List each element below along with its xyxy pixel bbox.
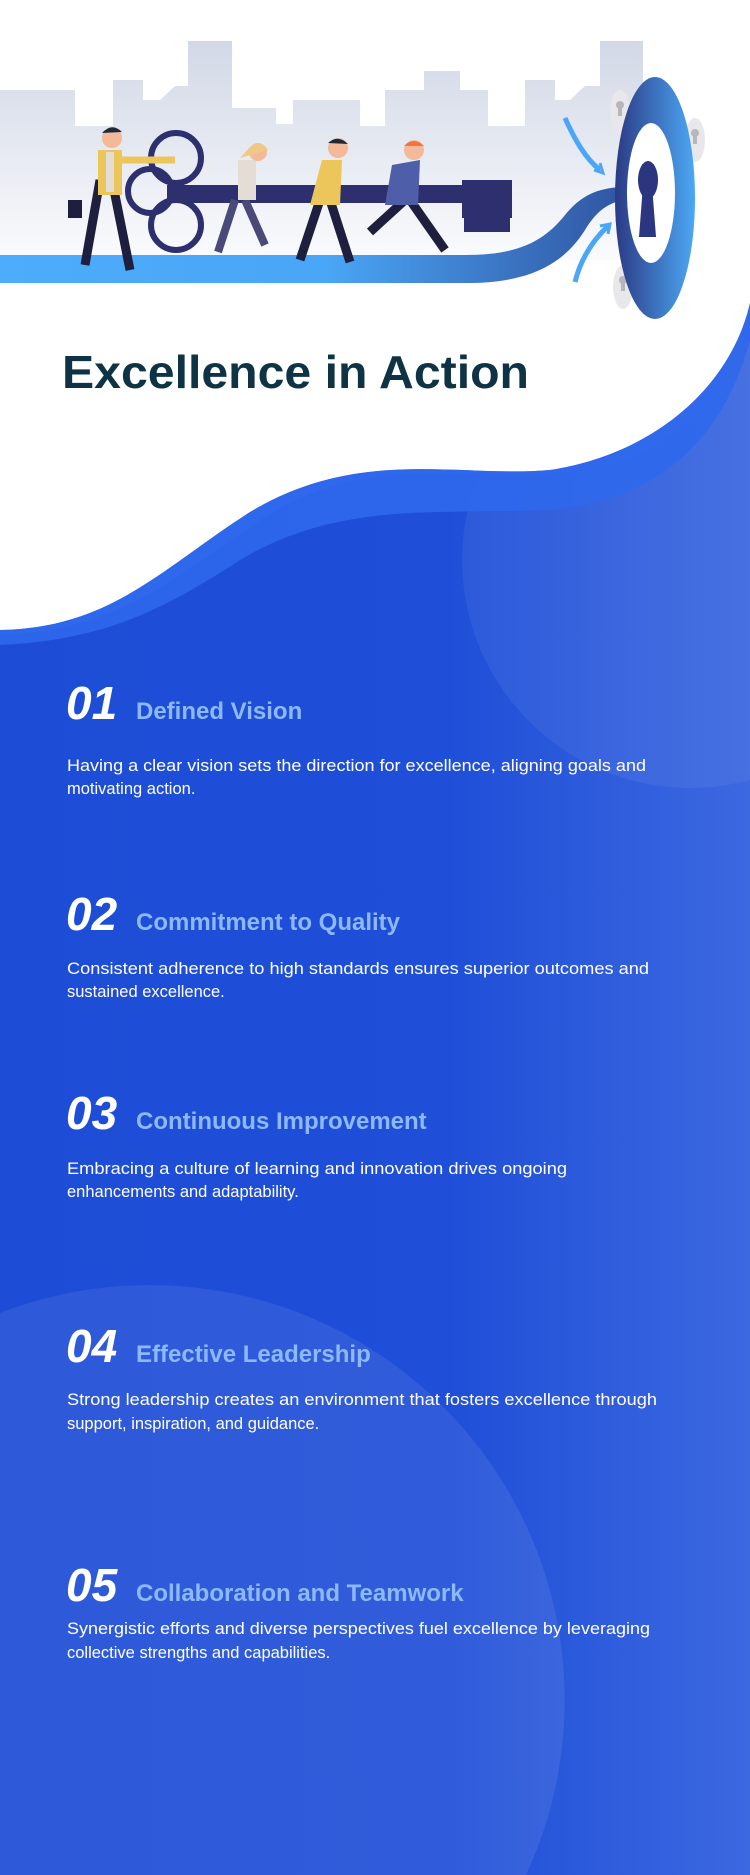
item 05: Synergistic efforts and diverse perspectives fuel excellence by leveraging — [67, 1620, 650, 1638]
item 04 — [66, 1320, 657, 1433]
illustration: keyhole disc — [610, 77, 705, 319]
item 03: enhancements and adaptability. — [67, 1183, 299, 1201]
wave light band — [0, 0, 750, 635]
white header area — [0, 0, 750, 630]
item 05: Collaboration and Teamwork — [136, 1580, 464, 1607]
item 05 — [66, 1559, 650, 1662]
item 01: 01 — [66, 677, 117, 729]
item 05: collective strengths and capabilities. — [67, 1644, 330, 1662]
item 01: Defined Vision — [136, 698, 302, 725]
item 01: Having a clear vision sets the direction for excellence, aligning goals and — [67, 757, 646, 775]
illustration: runners — [68, 127, 445, 270]
decorative circle bottom left — [0, 1285, 565, 1875]
icon: arrows into keyhole — [565, 118, 610, 282]
item 02: Consistent adherence to high standards ensures superior outcomes and — [67, 960, 649, 978]
item 01 — [66, 677, 646, 798]
illustration: key — [128, 133, 512, 250]
item 04: 04 — [66, 1320, 117, 1372]
item 02 — [66, 888, 649, 1001]
item 04: Strong leadership creates an environment that fosters excellence through — [67, 1391, 657, 1409]
item 03 — [66, 1087, 567, 1201]
item 02: Commitment to Quality — [136, 909, 401, 936]
item 01: motivating action. — [67, 780, 195, 798]
item 04: support, inspiration, and guidance. — [67, 1415, 319, 1433]
illustration: road to keyhole — [0, 185, 650, 283]
lighter wave band overlay — [0, 303, 750, 645]
illustration: skyline — [0, 41, 643, 260]
decorative circle top right — [462, 332, 750, 788]
title: Excellence in Action — [62, 346, 529, 398]
item 04: Effective Leadership — [136, 1341, 371, 1368]
item 03: 03 — [66, 1087, 118, 1139]
item 05: 05 — [66, 1559, 119, 1611]
item 02: sustained excellence. — [67, 983, 225, 1001]
item 03: Embracing a culture of learning and innovation drives ongoing — [67, 1160, 567, 1178]
item 02: 02 — [66, 888, 118, 940]
item 03: Continuous Improvement — [136, 1108, 427, 1135]
